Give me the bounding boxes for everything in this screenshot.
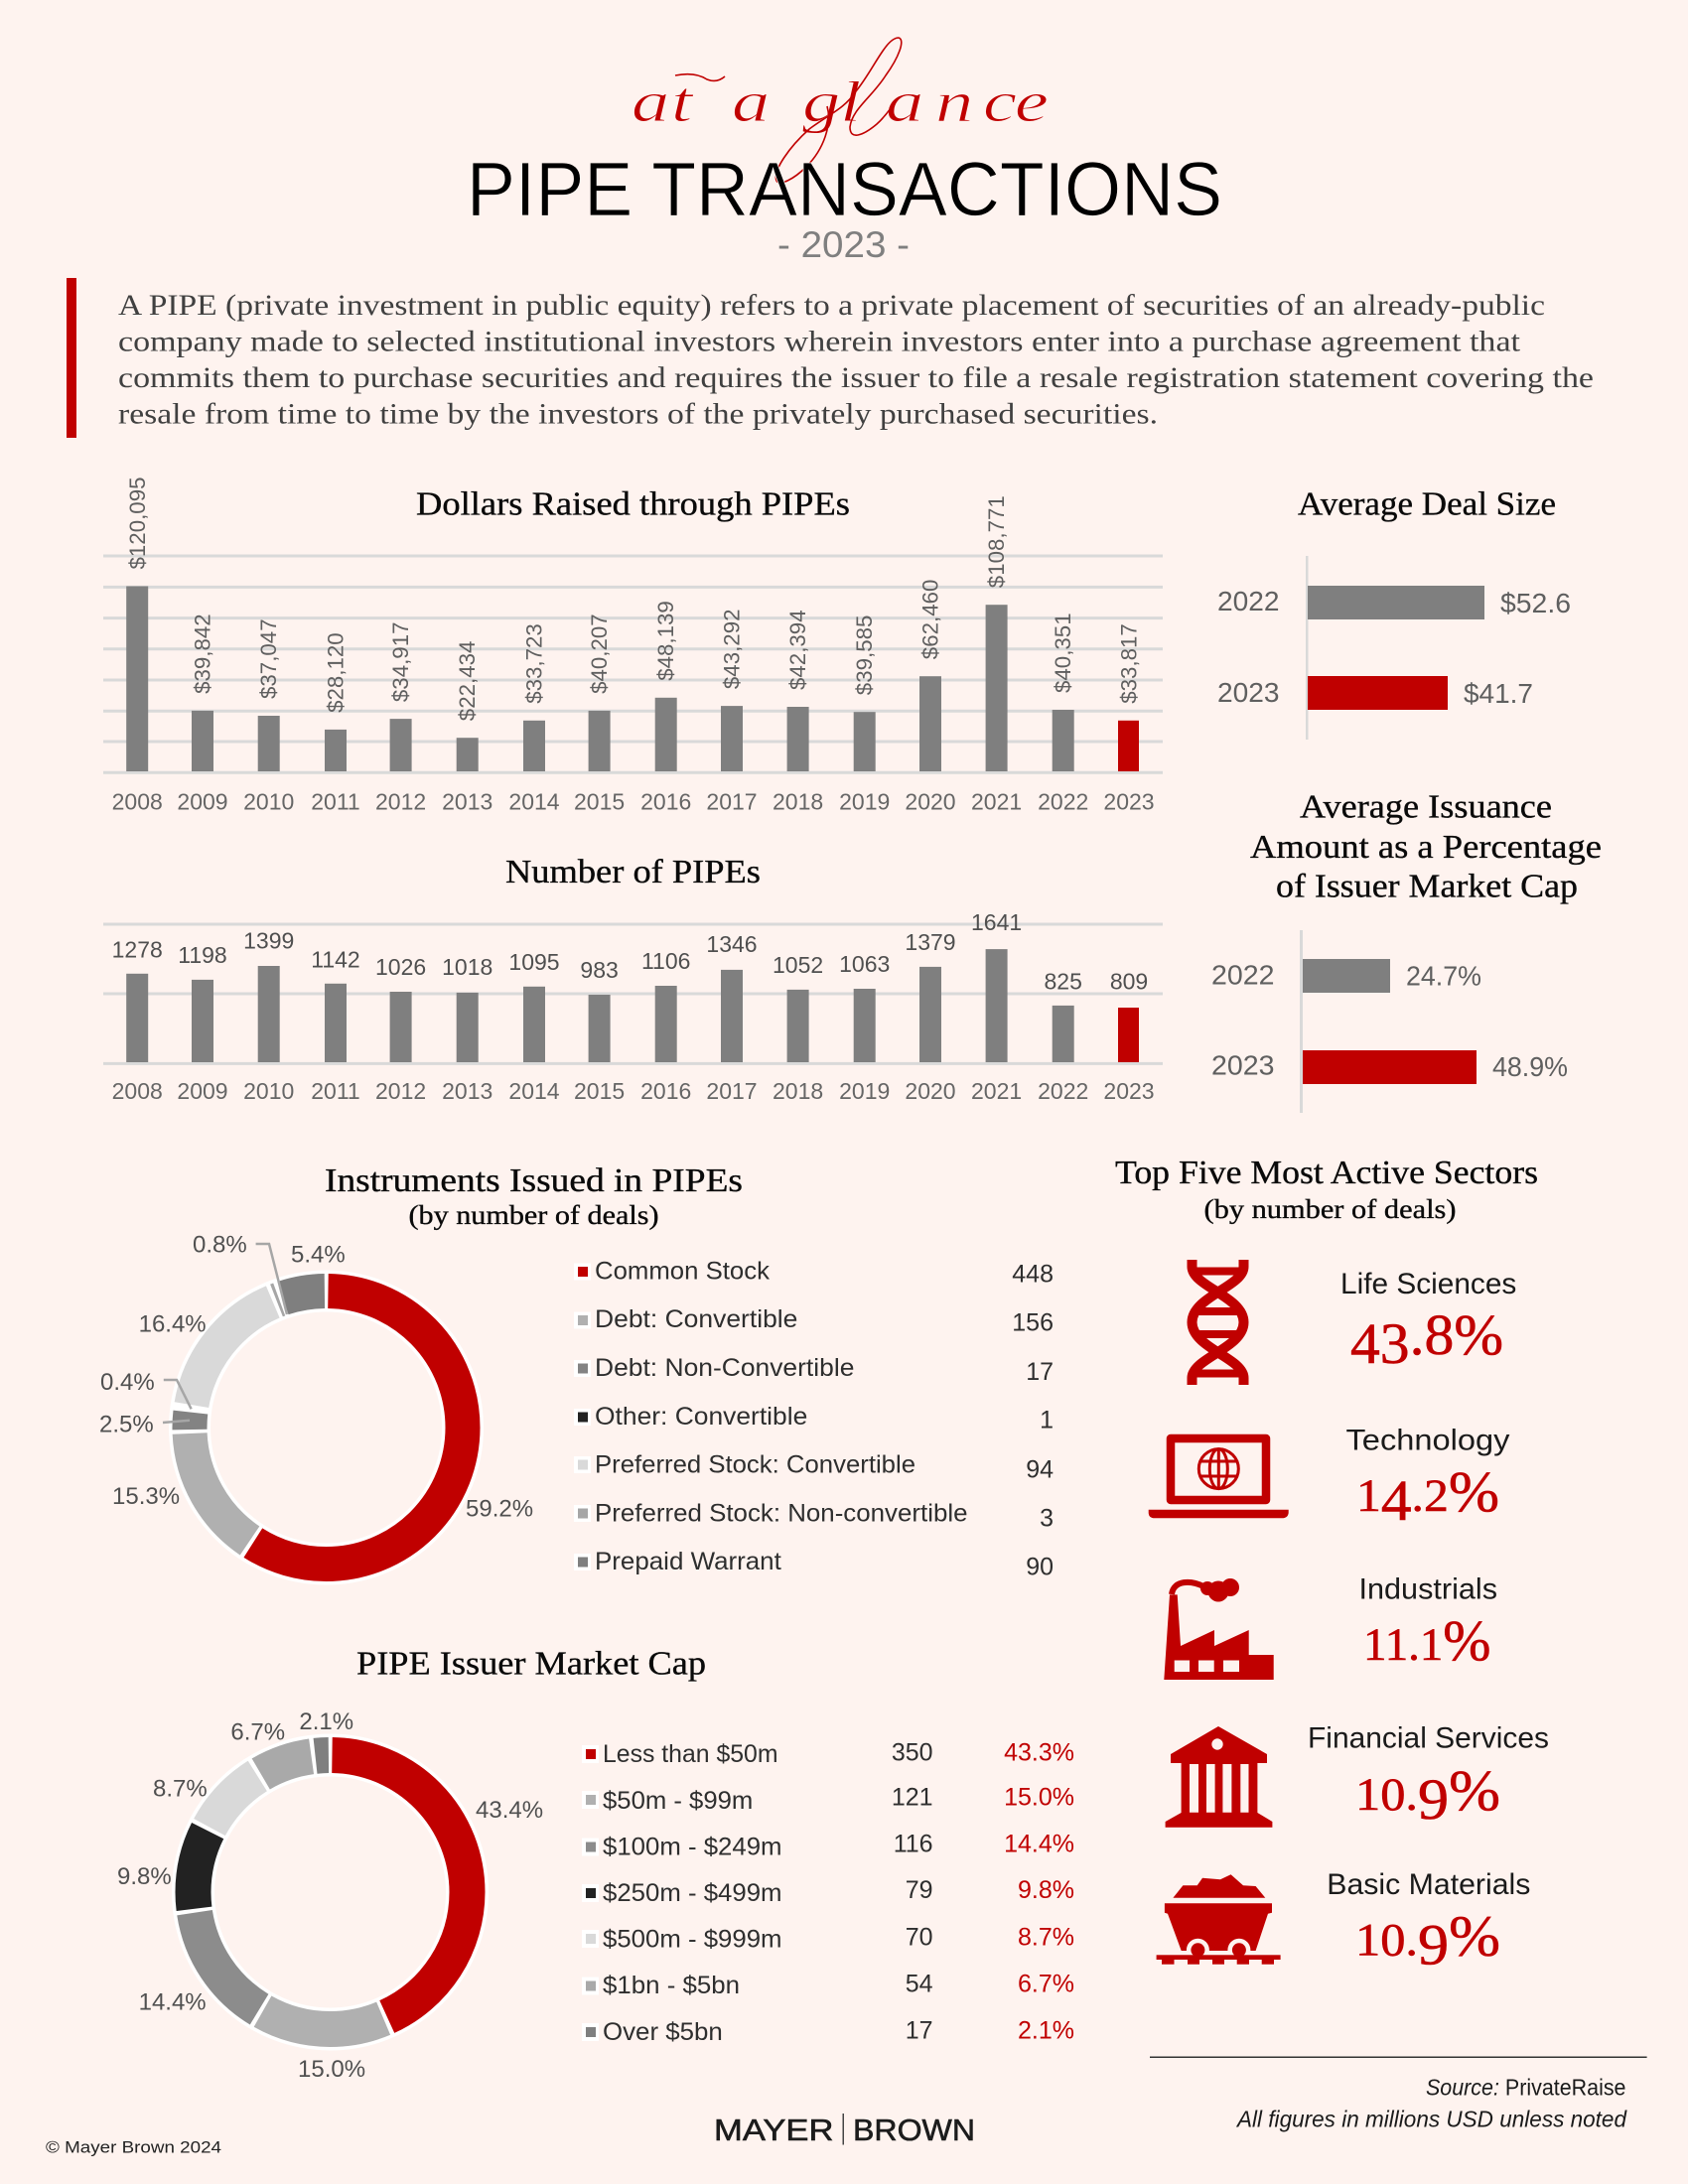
legend: market cap: 17 — [906, 2017, 933, 2045]
heading: PIPE Issuer Market Cap: PIPE Issuer Market Cap — [356, 1645, 706, 1682]
sector: Life Sciences: Life Sciences — [1340, 1268, 1516, 1300]
sector: Basic Materials: Basic Materials — [1327, 1868, 1530, 1901]
heading: Average Issuance Amount as a Percentage of Issuer Market Cap — [1250, 788, 1602, 905]
legend: market cap: 6.7% — [1018, 1970, 1074, 1997]
intro paragraph — [118, 289, 1594, 431]
value labels: number of PIPEs: 1346 — [706, 931, 758, 957]
sector: Basic Materials — [1327, 1868, 1530, 1977]
icon: mine cart — [1157, 1874, 1281, 1965]
bar: 2022 percentage — [1303, 959, 1390, 993]
donut value labels: market cap — [117, 1708, 543, 2083]
heading: Average Issuance Amount as a Percentage of Issuer Market Cap: Amount as a Percentage — [1250, 829, 1602, 866]
logo: Mayer Brown: MAYER — [714, 2113, 834, 2147]
sector: Technology: 1 — [1356, 1470, 1381, 1522]
rotated value labels: dollars raised: $62,460 — [917, 580, 943, 659]
value labels: number of PIPEs: 1379 — [905, 929, 956, 955]
year axis: number of PIPEs: 2015 — [574, 1078, 625, 1104]
sector: Basic Materials: 10. — [1355, 1914, 1418, 1966]
year axis: number of PIPEs: 2019 — [839, 1078, 890, 1104]
value labels: number of PIPEs: 1142 — [311, 946, 360, 972]
year axis: number of PIPEs: 2021 — [971, 1078, 1022, 1104]
bar chart: average deal size: $52.6 — [1500, 588, 1571, 618]
donut value labels: instruments: 0.8% — [193, 1232, 247, 1259]
legend: market cap: $50m - $99m — [603, 1787, 753, 1815]
legend: instruments: 90 — [1026, 1554, 1054, 1581]
rotated value labels: dollars raised: $108,771 — [984, 495, 1009, 588]
year axis: number of PIPEs: 2014 — [508, 1078, 560, 1104]
donut value labels: instruments: 0.4% — [100, 1369, 155, 1396]
value labels: number of PIPEs: 983 — [580, 957, 619, 983]
donut value labels: instruments: 2.5% — [99, 1412, 154, 1438]
year axis: dollars raised: 2016 — [640, 789, 691, 815]
year axis: dollars raised — [112, 789, 1155, 815]
bar chart: dollars raised — [103, 477, 1163, 815]
script title: at a glance: at a glance — [632, 69, 1049, 134]
copyright: © Mayer Brown 2024 — [46, 2138, 221, 2157]
value labels: number of PIPEs — [112, 909, 1148, 994]
legend: instruments — [574, 1257, 1054, 1581]
source note: All figures in millions USD unless noted — [1235, 2107, 1627, 2132]
year axis: number of PIPEs: 2022 — [1038, 1078, 1088, 1104]
sector: Basic Materials: % — [1449, 1903, 1500, 1968]
legend: instruments: 1 — [1040, 1407, 1054, 1434]
donut value labels: instruments: 59.2% — [466, 1496, 533, 1523]
sector: Technology: .2 — [1412, 1470, 1449, 1522]
year axis: dollars raised: 2015 — [574, 789, 625, 815]
year axis: number of PIPEs — [112, 1078, 1155, 1104]
sector: Financial Services — [1308, 1722, 1549, 1832]
bar chart: average deal size: $41.7 — [1464, 678, 1533, 709]
rotated value labels: dollars raised: $37,047 — [256, 618, 281, 699]
rotated value labels: dollars raised: $39,842 — [191, 614, 214, 694]
legend: market cap: 121 — [892, 1784, 933, 1812]
sector: Industrials: Industrials — [1358, 1573, 1497, 1606]
value labels: number of PIPEs: 1641 — [971, 909, 1022, 935]
year axis: dollars raised: 2017 — [706, 789, 758, 815]
intro paragraph: resale from time to time by the investors of the privately purchased securities. — [118, 397, 1158, 431]
year axis: dollars raised: 2022 — [1038, 789, 1088, 815]
donut value labels: market cap: 43.4% — [476, 1797, 543, 1824]
legend: market cap: $100m - $249m — [603, 1834, 782, 1861]
legend: instruments: Preferred Stock: Convertible — [595, 1450, 915, 1478]
rotated value labels: dollars raised: $42,394 — [785, 610, 810, 690]
intro accent bar — [67, 278, 76, 438]
logo: Mayer Brown: BROWN — [853, 2113, 975, 2147]
legend: market cap: Over $5bn — [603, 2018, 723, 2046]
legend: market cap: 15.0% — [1004, 1784, 1074, 1812]
value labels: number of PIPEs: 1095 — [508, 949, 560, 975]
value labels: number of PIPEs: 1399 — [243, 928, 294, 954]
legend: market cap: 8.7% — [1018, 1924, 1074, 1952]
value labels: number of PIPEs: 1026 — [375, 954, 426, 980]
icon: factory — [1164, 1578, 1274, 1680]
intro paragraph: commits them to purchase securities and requires the issuer to file a resale registration statement covering the — [118, 361, 1594, 394]
legend: market cap: 116 — [894, 1831, 933, 1858]
bar chart: issuance percentage: 2023 — [1211, 1050, 1275, 1081]
year axis: dollars raised: 2010 — [243, 789, 294, 815]
bars: dollars raised — [126, 586, 1139, 771]
legend: instruments: Prepaid Warrant — [595, 1548, 781, 1575]
heading: Instruments Issued in PIPEs: (by number of deals) — [409, 1200, 659, 1230]
legend: instruments: Debt: Convertible — [595, 1305, 797, 1333]
sector: Life Sciences: 43 — [1350, 1311, 1410, 1376]
heading: Top Five Most Active Sectors — [1115, 1155, 1538, 1224]
intro paragraph: A PIPE (private investment in public equity) refers to a private placement of securities of an already-public — [118, 289, 1545, 322]
value labels: number of PIPEs: 1278 — [112, 936, 163, 962]
rotated value labels: dollars raised: $39,585 — [852, 615, 877, 695]
legend: instruments: 448 — [1012, 1260, 1054, 1288]
donut chart: instruments — [190, 1291, 463, 1565]
legend: market cap: 43.3% — [1004, 1739, 1074, 1767]
year axis: dollars raised: 2008 — [112, 789, 163, 815]
year axis: dollars raised: 2013 — [442, 789, 492, 815]
bar chart: issuance percentage: 2022 — [1211, 960, 1275, 991]
sector: Financial Services: % — [1449, 1758, 1500, 1823]
rotated value labels: dollars raised — [125, 477, 1142, 721]
year axis: number of PIPEs: 2018 — [773, 1078, 823, 1104]
year axis: number of PIPEs: 2016 — [640, 1078, 691, 1104]
value labels: number of PIPEs: 809 — [1110, 968, 1148, 994]
legend: market cap: 70 — [906, 1924, 933, 1952]
legend: market cap: $500m - $999m — [603, 1926, 782, 1954]
year axis: number of PIPEs: 2020 — [905, 1078, 956, 1104]
legend: instruments: Common Stock — [595, 1257, 771, 1285]
bar: 2022 deal size — [1308, 586, 1484, 619]
value labels: number of PIPEs: 1106 — [641, 948, 690, 974]
bar chart: average deal size — [1217, 556, 1571, 740]
rotated value labels: dollars raised: $28,120 — [324, 632, 348, 713]
legend: market cap: $250m - $499m — [603, 1879, 782, 1907]
legend: market cap: 54 — [906, 1970, 933, 1997]
sector: Technology — [1346, 1425, 1509, 1533]
source note: Source: PrivateRaise — [1426, 2075, 1626, 2101]
year axis: number of PIPEs: 2010 — [243, 1078, 294, 1104]
sector: Basic Materials: 9 — [1418, 1912, 1449, 1977]
year axis: dollars raised: 2012 — [375, 789, 426, 815]
legend: instruments: Debt: Non-Convertible — [595, 1354, 854, 1382]
sector: Life Sciences — [1340, 1268, 1516, 1376]
icon: bank building — [1166, 1726, 1272, 1828]
icon: DNA helix — [1192, 1260, 1243, 1385]
logo: Mayer Brown — [714, 2113, 975, 2147]
sector: Financial Services: 9 — [1418, 1767, 1449, 1832]
sector: Industrials: 11.1% — [1363, 1608, 1491, 1673]
donut value labels: market cap: 8.7% — [153, 1776, 208, 1803]
donut value labels: market cap: 6.7% — [230, 1719, 285, 1745]
script title: at a glance — [632, 38, 1049, 183]
sector: Technology: % — [1449, 1459, 1499, 1524]
legend: instruments: 17 — [1026, 1358, 1054, 1386]
legend: instruments: 94 — [1026, 1455, 1054, 1483]
year axis: number of PIPEs: 2009 — [177, 1078, 228, 1104]
rotated value labels: dollars raised: $33,817 — [1116, 623, 1142, 704]
donut value labels: instruments — [99, 1232, 533, 1523]
donut value labels: market cap: 14.4% — [139, 1989, 207, 2016]
sector: Industrials — [1358, 1573, 1497, 1673]
year axis: number of PIPEs: 2012 — [375, 1078, 426, 1104]
bar chart: average deal size: 2022 — [1217, 586, 1279, 616]
year axis: number of PIPEs: 2023 — [1103, 1078, 1155, 1104]
sector: Technology: 4 — [1381, 1468, 1412, 1533]
year axis: dollars raised: 2019 — [839, 789, 890, 815]
legend: market cap: 350 — [892, 1739, 933, 1767]
value labels: number of PIPEs: 1063 — [839, 951, 890, 977]
donut chart: market cap — [193, 1755, 467, 2029]
donut value labels: market cap: 9.8% — [117, 1863, 172, 1890]
bars: number of PIPEs — [126, 949, 1139, 1062]
icon: laptop with globe — [1149, 1438, 1289, 1518]
rotated value labels: dollars raised: $40,207 — [587, 614, 612, 694]
heading: Average Issuance Amount as a Percentage of Issuer Market Cap: of Issuer Market Cap — [1276, 869, 1578, 905]
main title: PIPE TRANSACTIONS — [467, 147, 1222, 232]
value labels: number of PIPEs: 1198 — [178, 942, 227, 968]
legend: market cap: 79 — [906, 1876, 933, 1904]
year axis: dollars raised: 2021 — [971, 789, 1022, 815]
year axis: dollars raised: 2020 — [905, 789, 956, 815]
year axis: dollars raised: 2009 — [177, 789, 228, 815]
sector: Technology: Technology — [1346, 1425, 1509, 1457]
legend: market cap: 9.8% — [1018, 1876, 1074, 1904]
year axis: number of PIPEs: 2013 — [442, 1078, 492, 1104]
bar chart: issuance percentage: 24.7% — [1406, 961, 1481, 991]
year axis: dollars raised: 2014 — [508, 789, 560, 815]
donut value labels: market cap: 15.0% — [298, 2056, 365, 2083]
bar chart: number of PIPEs — [103, 909, 1163, 1104]
value labels: number of PIPEs: 1052 — [773, 952, 823, 978]
donut value labels: instruments: 15.3% — [112, 1483, 180, 1510]
year axis: dollars raised: 2011 — [311, 789, 360, 815]
legend: market cap: 2.1% — [1018, 2017, 1074, 2045]
rotated value labels: dollars raised: $48,139 — [653, 601, 678, 681]
donut value labels: market cap: 2.1% — [299, 1708, 353, 1735]
rotated value labels: dollars raised: $22,434 — [455, 641, 480, 721]
rotated value labels: dollars raised: $34,917 — [388, 621, 413, 702]
donut value labels: instruments: 16.4% — [139, 1311, 207, 1338]
sector: Life Sciences: .8% — [1410, 1302, 1503, 1367]
source note — [1235, 2075, 1627, 2132]
intro paragraph: company made to selected institutional investors wherein investors enter into a purchase agreement that — [118, 326, 1521, 357]
year axis: number of PIPEs: 2008 — [112, 1078, 163, 1104]
heading: Instruments Issued in PIPEs — [325, 1162, 743, 1230]
sector: Financial Services: Financial Services — [1308, 1722, 1549, 1755]
heading: Average Deal Size: Average Deal Size — [1298, 486, 1556, 522]
legend: market cap — [582, 1739, 1074, 2046]
year axis: dollars raised: 2023 — [1103, 789, 1155, 815]
bar: 2023 deal size — [1308, 676, 1448, 710]
heading: Dollars Raised through PIPEs: Dollars Raised through PIPEs — [416, 486, 850, 522]
legend: instruments: 156 — [1012, 1309, 1054, 1337]
heading: Top Five Most Active Sectors: Top Five Most Active Sectors — [1115, 1155, 1538, 1191]
value labels: number of PIPEs: 825 — [1045, 968, 1082, 994]
bar chart: average deal size: 2023 — [1217, 677, 1279, 708]
bar: 2023 percentage — [1303, 1050, 1477, 1084]
year axis: number of PIPEs: 2011 — [311, 1078, 360, 1104]
year axis: number of PIPEs: 2017 — [706, 1078, 758, 1104]
year subtitle: - 2023 - — [777, 224, 910, 265]
sector: Financial Services: 10. — [1355, 1769, 1418, 1821]
heading: Instruments Issued in PIPEs: Instruments Issued in PIPEs — [325, 1162, 743, 1199]
rotated value labels: dollars raised: $120,095 — [125, 477, 150, 570]
bar chart: issuance percentage: 48.9% — [1492, 1051, 1568, 1082]
legend: market cap: 14.4% — [1004, 1831, 1074, 1858]
rotated value labels: dollars raised: $40,351 — [1051, 613, 1075, 693]
year axis: dollars raised: 2018 — [773, 789, 823, 815]
legend: instruments: Preferred Stock: Non-convertible — [595, 1499, 967, 1527]
legend: instruments: Other: Convertible — [595, 1403, 807, 1431]
value labels: number of PIPEs: 1018 — [442, 954, 492, 980]
rotated value labels: dollars raised: $33,723 — [522, 623, 546, 704]
legend: market cap: $1bn - $5bn — [603, 1972, 740, 1999]
donut value labels: instruments: 5.4% — [291, 1242, 346, 1269]
rotated value labels: dollars raised: $43,292 — [719, 609, 745, 689]
heading: Number of PIPEs: Number of PIPEs — [505, 854, 761, 890]
legend: market cap: Less than $50m — [603, 1740, 778, 1768]
bar chart: issuance percentage — [1211, 930, 1568, 1113]
donut leader lines: instruments — [163, 1244, 287, 1423]
heading: Average Issuance Amount as a Percentage of Issuer Market Cap: Average Issuance — [1300, 788, 1552, 825]
heading: Top Five Most Active Sectors: (by number of deals) — [1203, 1194, 1456, 1224]
legend: instruments: 3 — [1040, 1504, 1054, 1532]
